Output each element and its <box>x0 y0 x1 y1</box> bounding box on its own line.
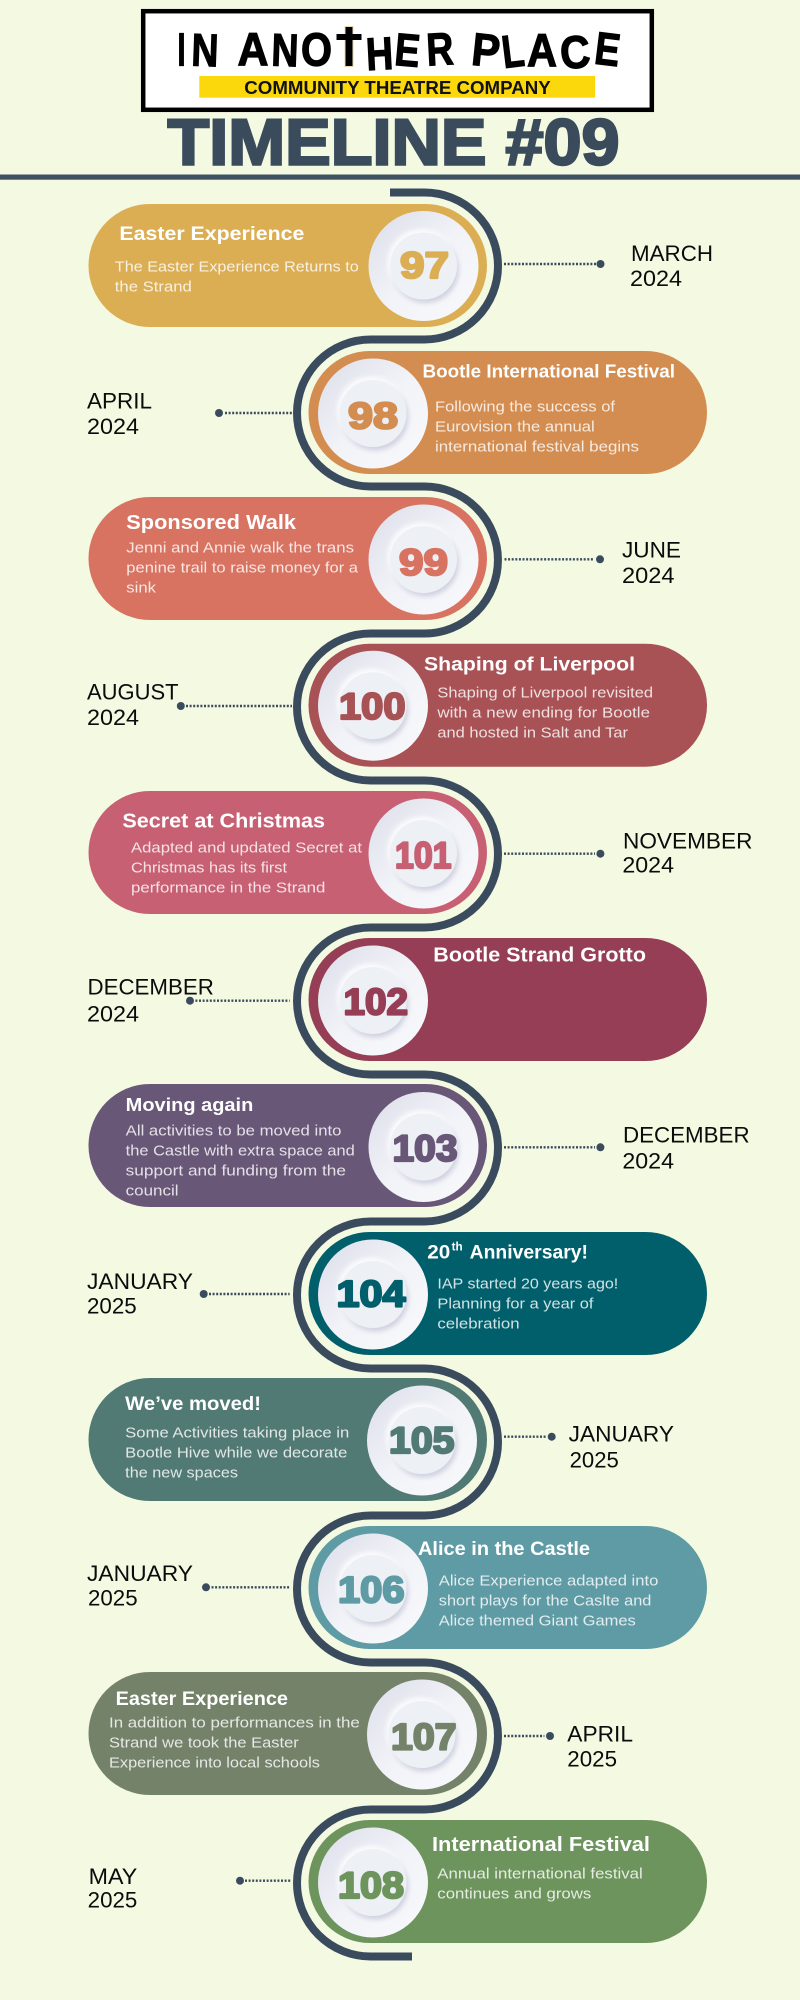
panel: 100 Shaping of Liverpool: AUGUST <box>87 679 178 704</box>
panel: 101 Secret at Christmas: performance in the Strand <box>131 880 325 896</box>
logo: In Another Place: L <box>499 24 527 78</box>
panel: 101 Secret at Christmas: 101 <box>395 835 452 876</box>
panel: 100 Shaping of Liverpool: 100 <box>339 686 406 727</box>
panel: 108 International Festival: International Festival <box>432 1833 650 1856</box>
panel: 97 Easter Experience <box>88 204 713 327</box>
logo: In Another Place: COMMUNITY THEATRE COMPANY <box>244 77 551 98</box>
panel: 99 Sponsored Walk: sink <box>126 580 157 596</box>
panel: 103 Moving again <box>88 1084 750 1207</box>
logo: In Another Place: P <box>469 23 503 77</box>
panel: 97 Easter Experience: 97 <box>400 245 449 286</box>
panel: 104 20th Anniversary <box>87 1232 707 1355</box>
panel: 106 Alice in the Castle: Alice in the Castle <box>418 1538 590 1560</box>
panel: 104 20th Anniversary: th <box>452 1242 463 1254</box>
panel: 101 Secret at Christmas: 2024 <box>622 853 674 878</box>
panel: 97 Easter Experience: MARCH <box>631 241 713 266</box>
logo: In Another Place: A <box>527 24 557 76</box>
panel: 108 International Festival: MAY <box>89 1864 138 1889</box>
panel: 98 Bootle International Festival: 2024 <box>87 414 139 439</box>
panel: 101 Secret at Christmas: Christmas has its first <box>131 860 287 876</box>
panel: 106 Alice in the Castle: 2025 <box>88 1586 138 1611</box>
panel: 103 Moving again: DECEMBER <box>623 1122 750 1147</box>
panel: 108 International Festival <box>88 1820 707 1943</box>
panel: 103 Moving again: 103 <box>392 1128 458 1169</box>
logo: In Another Place: O <box>301 24 332 76</box>
panel: 106 Alice in the Castle: short plays for the Caslte and <box>439 1593 651 1609</box>
panel: 106 Alice in the Castle: Alice themed Giant Games <box>439 1613 636 1629</box>
panel: 103 Moving again: support and funding from the <box>126 1163 346 1179</box>
panel: 97 Easter Experience: 2024 <box>630 266 682 291</box>
panel: 97 Easter Experience: the Strand <box>115 280 192 296</box>
panel: 101 Secret at Christmas: Adapted and updated Secret at <box>131 840 362 856</box>
panel: 100 Shaping of Liverpool: with a new ending for Bootle <box>436 706 650 722</box>
panel: 105 We've moved: 2025 <box>570 1448 619 1473</box>
panel: 98 Bootle International Festival: Eurovision the annual <box>435 420 595 436</box>
panel: 98 Bootle International Festival: international festival begins <box>435 440 639 456</box>
panel: 108 International Festival: continues and grows <box>437 1886 591 1902</box>
panel: 104 20th Anniversary: JANUARY <box>87 1269 193 1294</box>
panel: 104 20th Anniversary: Anniversary! <box>470 1241 588 1263</box>
panel: 107 Easter Experience: In addition to performances in the <box>109 1715 360 1731</box>
panel: 98 Bootle International Festival: 98 <box>348 396 398 436</box>
panel: 99 Sponsored Walk: 99 <box>399 542 448 583</box>
panel: 103 Moving again: the Castle with extra space and <box>126 1143 355 1159</box>
panel: 102 Bootle Strand Grotto <box>87 938 707 1061</box>
panel: 101 Secret at Christmas: NOVEMBER <box>623 829 752 854</box>
panel: 104 20th Anniversary: Planning for a year of <box>437 1296 594 1312</box>
panel: 107 Easter Experience: 2025 <box>567 1747 617 1772</box>
panel: 99 Sponsored Walk: 2024 <box>622 563 674 588</box>
panel: 100 Shaping of Liverpool: 2024 <box>87 705 139 730</box>
panel: 99 Sponsored Walk: Sponsored Walk <box>126 511 297 534</box>
panel: 106 Alice in the Castle: JANUARY <box>87 1561 193 1586</box>
panel: 108 International Festival: 2025 <box>88 1887 137 1912</box>
panel: 108 International Festival: Annual international festival <box>437 1866 643 1882</box>
panel: 98 Bootle International Festival: Bootle International Festival <box>422 361 675 381</box>
panel: 103 Moving again: All activities to be moved into <box>126 1123 342 1139</box>
panel: 105 We've moved: We’ve moved! <box>125 1393 261 1415</box>
panel: 106 Alice in the Castle: 106 <box>338 1570 404 1610</box>
panel: 100 Shaping of Liverpool <box>87 644 707 767</box>
panel: 103 Moving again: council <box>126 1183 178 1199</box>
panel: 106 Alice in the Castle <box>87 1526 707 1649</box>
panel: 107 Easter Experience: APRIL <box>567 1722 633 1747</box>
panel: 102 Bootle Strand Grotto: 2024 <box>87 1002 139 1027</box>
panel: 105 We've moved: Bootle Hive while we decorate <box>125 1445 347 1461</box>
panel: 104 20th Anniversary: celebration <box>437 1316 520 1332</box>
panel: 107 Easter Experience: Experience into local schools <box>109 1755 320 1771</box>
logo: In Another Place: N <box>191 24 219 76</box>
panel: 107 Easter Experience: Strand we took the Easter <box>109 1735 299 1751</box>
panel: 103 Moving again: 2024 <box>622 1148 674 1173</box>
logo: In Another Place: E <box>592 22 623 76</box>
panel: 98 Bootle International Festival: Following the success of <box>435 400 616 416</box>
panel: 97 Easter Experience: The Easter Experience Returns to <box>115 260 359 276</box>
panel: 104 20th Anniversary: IAP started 20 years ago! <box>437 1276 618 1292</box>
panel: 99 Sponsored Walk: Jenni and Annie walk the trans <box>126 540 354 556</box>
logo: In Another Place: E <box>393 23 422 77</box>
panel: 105 We've moved: Some Activities taking place in <box>125 1425 349 1441</box>
logo: In Another Place: C <box>558 25 592 79</box>
panel: 102 Bootle Strand Grotto: 102 <box>344 982 408 1022</box>
panel: 100 Shaping of Liverpool: and hosted in Salt and Tar <box>437 726 628 742</box>
panel: 106 Alice in the Castle: Alice Experience adapted into <box>439 1573 658 1589</box>
serpentine timeline line <box>297 192 498 1956</box>
panel: 101 Secret at Christmas: Secret at Christmas <box>122 810 325 833</box>
panel: 99 Sponsored Walk: JUNE <box>622 538 681 563</box>
panel: 102 Bootle Strand Grotto: DECEMBER <box>88 974 214 999</box>
panel: 107 Easter Experience: 107 <box>391 1716 456 1758</box>
panel: 97 Easter Experience: Easter Experience <box>119 223 305 245</box>
panel: 99 Sponsored Walk <box>88 497 681 620</box>
panel: 108 International Festival: 108 <box>338 1865 404 1906</box>
panel: 107 Easter Experience <box>88 1672 633 1795</box>
logo: In Another Place: A <box>238 23 268 75</box>
panel: 105 We've moved: 105 <box>389 1420 454 1461</box>
panel: 102 Bootle Strand Grotto: Bootle Strand Grotto <box>433 944 646 967</box>
logo: In Another Place: R <box>425 22 455 76</box>
panel: 101 Secret at Christmas <box>88 791 752 914</box>
panel: 104 20th Anniversary: 2025 <box>87 1293 137 1318</box>
logo: In Another Place: H <box>365 27 394 80</box>
logo: In Another Place: I <box>178 24 186 76</box>
panel: 105 We've moved: the new spaces <box>125 1465 238 1481</box>
title: TIMELINE #09 <box>168 106 620 178</box>
panel: 104 20th Anniversary: 20 <box>427 1241 450 1263</box>
panel: 103 Moving again: Moving again <box>126 1094 253 1115</box>
panel: 105 We've moved <box>88 1378 674 1501</box>
panel: 100 Shaping of Liverpool: Shaping of Liverpool <box>424 654 635 676</box>
panel: 107 Easter Experience: Easter Experience <box>116 1688 288 1710</box>
panel: 105 We've moved: JANUARY <box>569 1422 674 1447</box>
panel: 104 20th Anniversary: 104 <box>336 1274 406 1314</box>
panel: 99 Sponsored Walk: penine trail to raise money for a <box>126 560 359 576</box>
panel: 98 Bootle International Festival: APRIL <box>87 389 152 414</box>
logo: In Another Place: N <box>271 24 299 76</box>
panel: 100 Shaping of Liverpool: Shaping of Liverpool revisited <box>437 686 653 702</box>
logo: In Another Place <box>143 11 652 110</box>
panel: 98 Bootle International Festival <box>87 351 707 474</box>
